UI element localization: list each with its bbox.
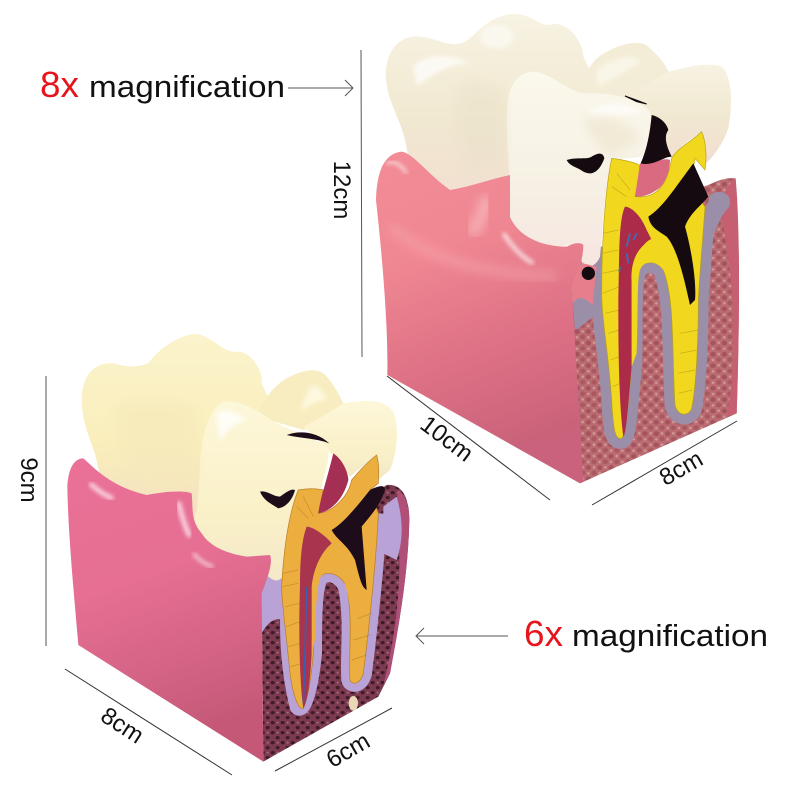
dimension: 12cm: 12cm [328, 161, 355, 219]
deep decay [332, 486, 385, 590]
section: bone and soft tissue [572, 178, 739, 483]
right gum strip [383, 490, 409, 685]
pulp vessels [619, 233, 637, 272]
lavender upper right [383, 497, 402, 560]
dentin tubule lines [602, 173, 698, 393]
back right cusp [580, 43, 668, 100]
arrow: to small model [416, 628, 508, 644]
soft tissue fill at tooth neck [572, 247, 605, 330]
top cavity [287, 432, 329, 443]
front crown [190, 401, 329, 581]
gum highlights [90, 483, 213, 567]
section: bone and soft tissue [262, 485, 409, 762]
crown highlights and shading [413, 25, 643, 180]
cervical decay spot [582, 267, 595, 280]
gum block [67, 458, 271, 762]
heading: 6x magnification: 6x [524, 613, 563, 654]
pulp chamber and canal [618, 207, 652, 437]
pulp vessel [303, 587, 307, 703]
soft tissue fill at tooth neck [260, 553, 285, 637]
heading: 6x magnification [524, 613, 768, 654]
pulp exposure cavity [318, 453, 348, 513]
inner yellow arch [632, 238, 680, 367]
front crown [507, 72, 651, 267]
heading: 6x magnification: magnification [572, 618, 768, 653]
dimension: 10cm: 10cm [415, 411, 478, 467]
dimension: 6cm [275, 708, 392, 774]
side cavity [260, 490, 295, 508]
heading: 8x magnification: 8x [40, 64, 79, 105]
heading: 8x magnification: magnification [89, 69, 285, 104]
pulp exposure cavity [635, 159, 670, 197]
dimension: 8cm small model: 8cm [96, 702, 148, 749]
dimension: 8cm small model [65, 669, 232, 775]
lavender upper right [700, 192, 730, 240]
gum block [376, 152, 583, 483]
right cusp [623, 65, 731, 163]
crown shading [113, 386, 327, 492]
back right cusp [257, 370, 343, 430]
side cavity [567, 154, 604, 173]
heading: 8x magnification [40, 64, 285, 105]
fissure [625, 96, 647, 104]
inner orange arch [312, 547, 358, 653]
dimension: 9cm: 9cm [15, 457, 42, 503]
arrow: to large model [288, 80, 353, 96]
panel: large 8x tooth model [376, 14, 739, 483]
panel: small 6x tooth model [67, 334, 409, 762]
root tip [349, 696, 358, 711]
dimension: 8cm large model [592, 421, 737, 505]
dimension: 10cm [387, 376, 550, 500]
gum notch [572, 263, 597, 305]
right cusp [303, 401, 397, 480]
dentin orange [282, 455, 379, 708]
deep decay [648, 163, 708, 305]
dimension: 8cm large model: 8cm [655, 445, 708, 492]
gum highlights [387, 162, 557, 277]
periodontal lavender tissue [602, 207, 705, 439]
dimension: 6cm: 6cm [322, 727, 375, 774]
right gum strip [720, 178, 739, 417]
back molar crown [386, 14, 603, 213]
pulp chamber and canal [299, 527, 332, 708]
dentin yellow [602, 132, 706, 439]
enamel decay top [641, 115, 672, 164]
dentin tubule lines [283, 497, 372, 667]
periodontal lavender tissue [289, 513, 378, 707]
back molar crown [82, 334, 277, 520]
